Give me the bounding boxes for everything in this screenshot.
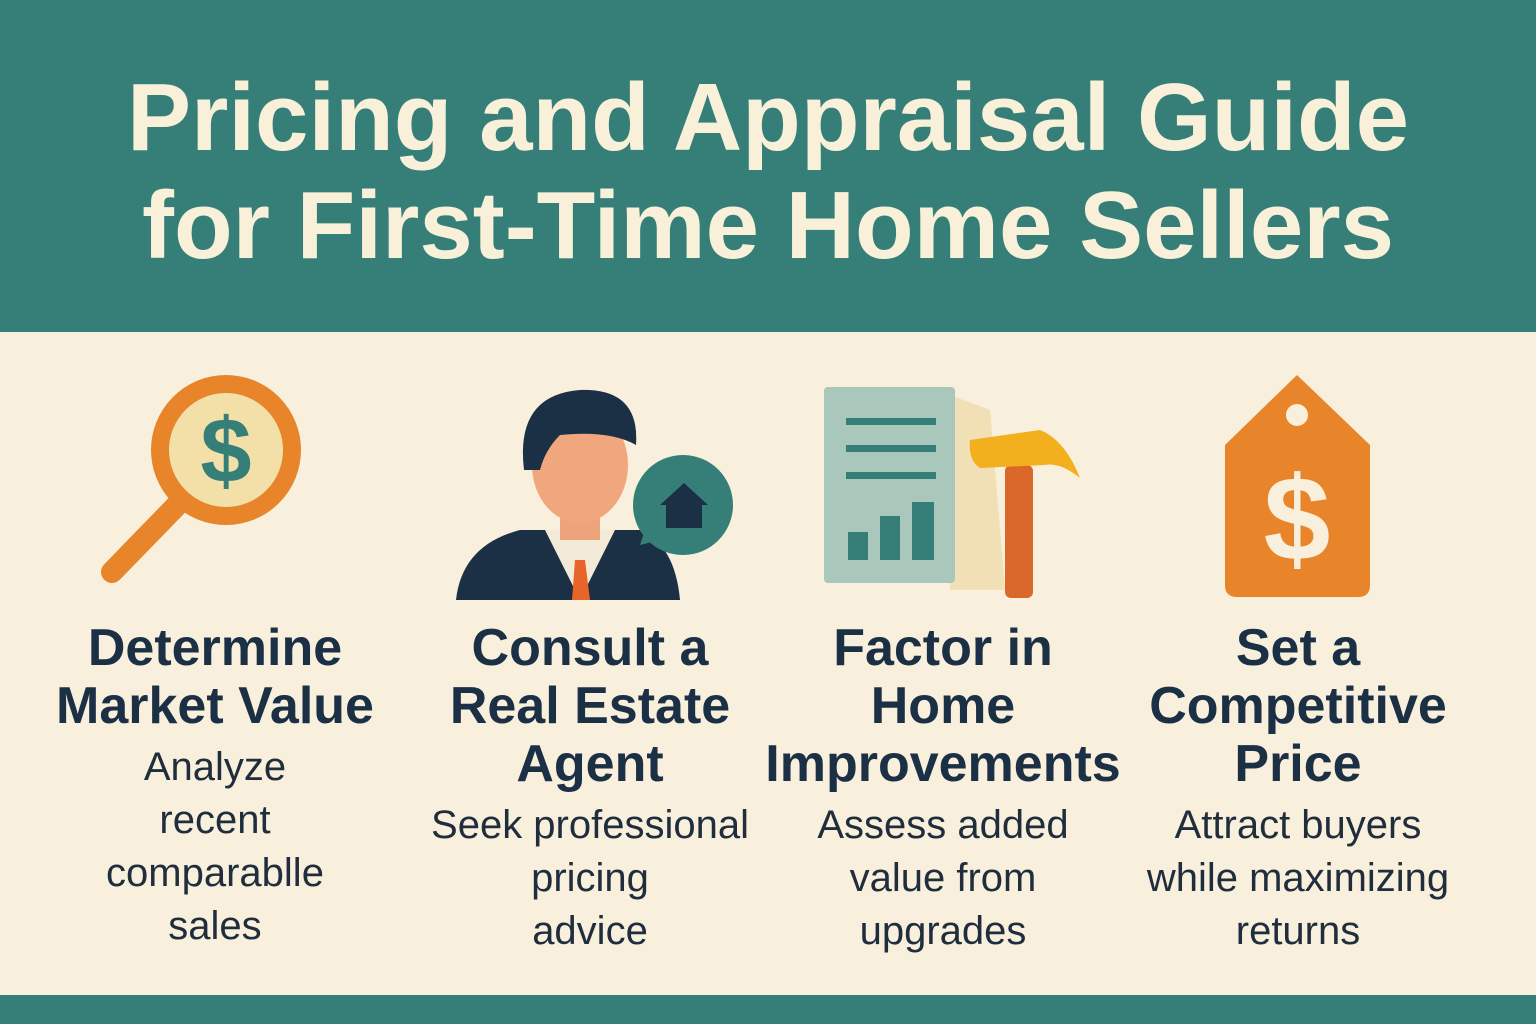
column: home improvements: Factor in <box>833 619 1053 677</box>
column: home improvements: Improvements <box>765 735 1121 793</box>
column: competitive price: Price <box>1234 735 1362 793</box>
column: competitive price: Competitive <box>1149 677 1447 735</box>
column: determine market value: recent <box>159 798 271 842</box>
icon: document with hammer <box>824 387 1080 598</box>
column: consult agent <box>431 619 749 953</box>
column: consult agent: Agent <box>516 735 664 793</box>
column: home improvements: upgrades <box>860 909 1026 953</box>
column: determine market value: Determine <box>88 619 342 677</box>
icon: magnifier <box>112 384 292 572</box>
column: determine market value: Market Value <box>56 677 374 735</box>
icon: price tag: $ <box>1264 452 1330 586</box>
column: home improvements: Assess added <box>817 803 1069 847</box>
column: consult agent: Seek professional <box>431 803 749 847</box>
title: for First-Time Home Sellers <box>142 172 1394 279</box>
column: competitive price: returns <box>1236 909 1360 953</box>
column: determine market value <box>56 619 374 948</box>
column: home improvements <box>765 619 1121 953</box>
column: home improvements: Home <box>871 677 1015 735</box>
column: competitive price: while maximizing <box>1147 856 1449 900</box>
column: consult agent: Consult a <box>472 619 708 677</box>
title <box>127 64 1409 279</box>
header band <box>0 0 1536 332</box>
icon: agent <box>456 390 733 600</box>
column: consult agent: Real Estate <box>450 677 730 735</box>
column: determine market value: sales <box>168 904 262 948</box>
column: consult agent: pricing <box>531 856 649 900</box>
column: determine market value: Analyze <box>144 745 286 789</box>
column: determine market value: comparablle <box>106 851 324 895</box>
footer band <box>0 995 1536 1024</box>
column: consult agent: advice <box>532 909 648 953</box>
icon: price tag <box>1225 375 1370 597</box>
title: Pricing and Appraisal Guide <box>127 64 1409 171</box>
column: home improvements: value from <box>850 856 1036 900</box>
column: competitive price <box>1146 619 1449 953</box>
column: competitive price: Attract buyers <box>1175 803 1421 847</box>
column: competitive price: Set a <box>1236 619 1360 677</box>
icon: magnifier: $ <box>200 400 252 502</box>
